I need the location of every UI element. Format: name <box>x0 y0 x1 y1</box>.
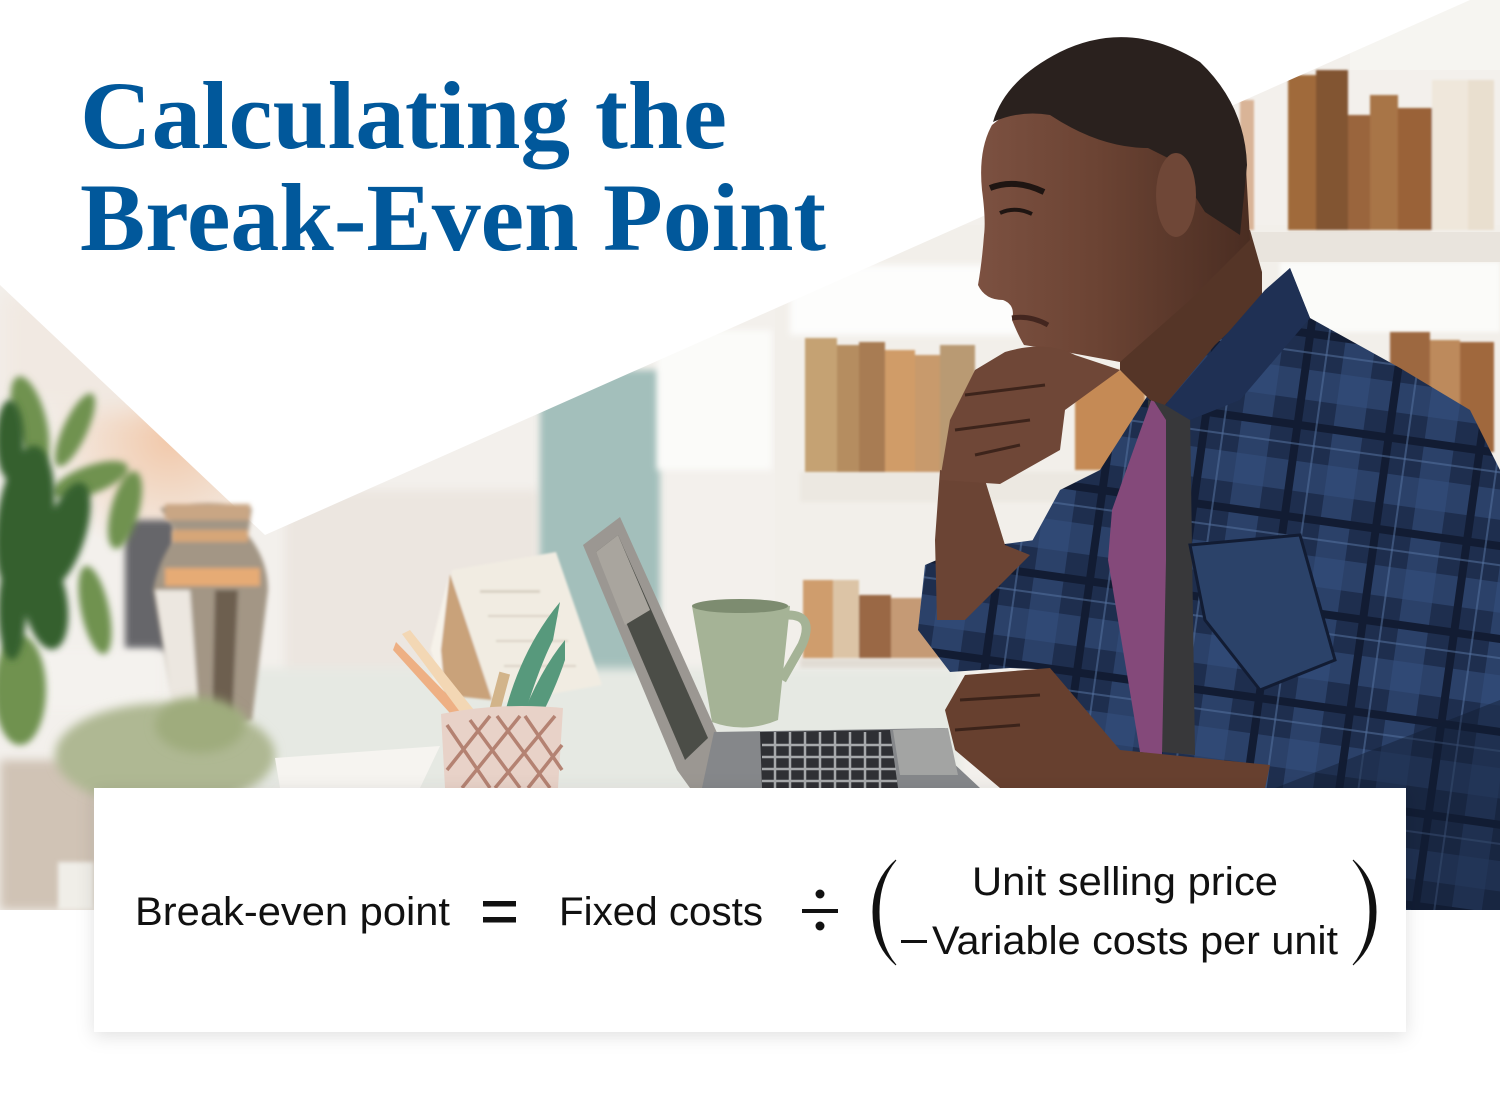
purple t-shirt <box>1108 398 1166 755</box>
term: unit selling price: Unit selling price <box>972 860 1278 904</box>
formula card <box>94 788 1406 1032</box>
bookshelf <box>775 0 1500 668</box>
title: Calculating the <box>80 62 727 169</box>
white angled panel <box>0 0 1470 535</box>
mug <box>692 599 806 728</box>
man <box>918 37 1500 910</box>
division sign <box>802 890 838 930</box>
papers <box>275 746 440 788</box>
left parenthesis <box>873 860 896 965</box>
forearm <box>935 470 1030 620</box>
title: Break-Even Point <box>80 164 826 271</box>
hair <box>993 37 1247 235</box>
minus sign <box>901 940 927 943</box>
laptop <box>583 517 980 788</box>
lower sleeve shade <box>1270 700 1500 910</box>
head <box>978 114 1250 362</box>
title <box>80 62 826 271</box>
sleeve <box>918 540 1050 672</box>
term: variable costs per unit: Variable costs per unit <box>932 919 1338 963</box>
mouth <box>1012 317 1048 325</box>
right parenthesis <box>1353 860 1376 965</box>
lower hand <box>945 668 1270 788</box>
vase <box>153 503 268 740</box>
term: fixed costs: Fixed costs <box>559 890 763 934</box>
blurred plants <box>0 372 275 910</box>
grey undershirt <box>1148 400 1195 755</box>
chin hand <box>940 347 1120 484</box>
pencil holder with pens <box>393 602 565 788</box>
eye and brow <box>990 184 1044 192</box>
neck <box>1120 230 1262 405</box>
chest pocket <box>1190 535 1335 690</box>
collar <box>1165 268 1310 420</box>
shirt body <box>1000 268 1500 910</box>
equals sign <box>483 901 516 922</box>
ear <box>1156 153 1196 237</box>
term: break-even point: Break-even point <box>135 890 450 934</box>
desk calendar <box>430 552 602 702</box>
